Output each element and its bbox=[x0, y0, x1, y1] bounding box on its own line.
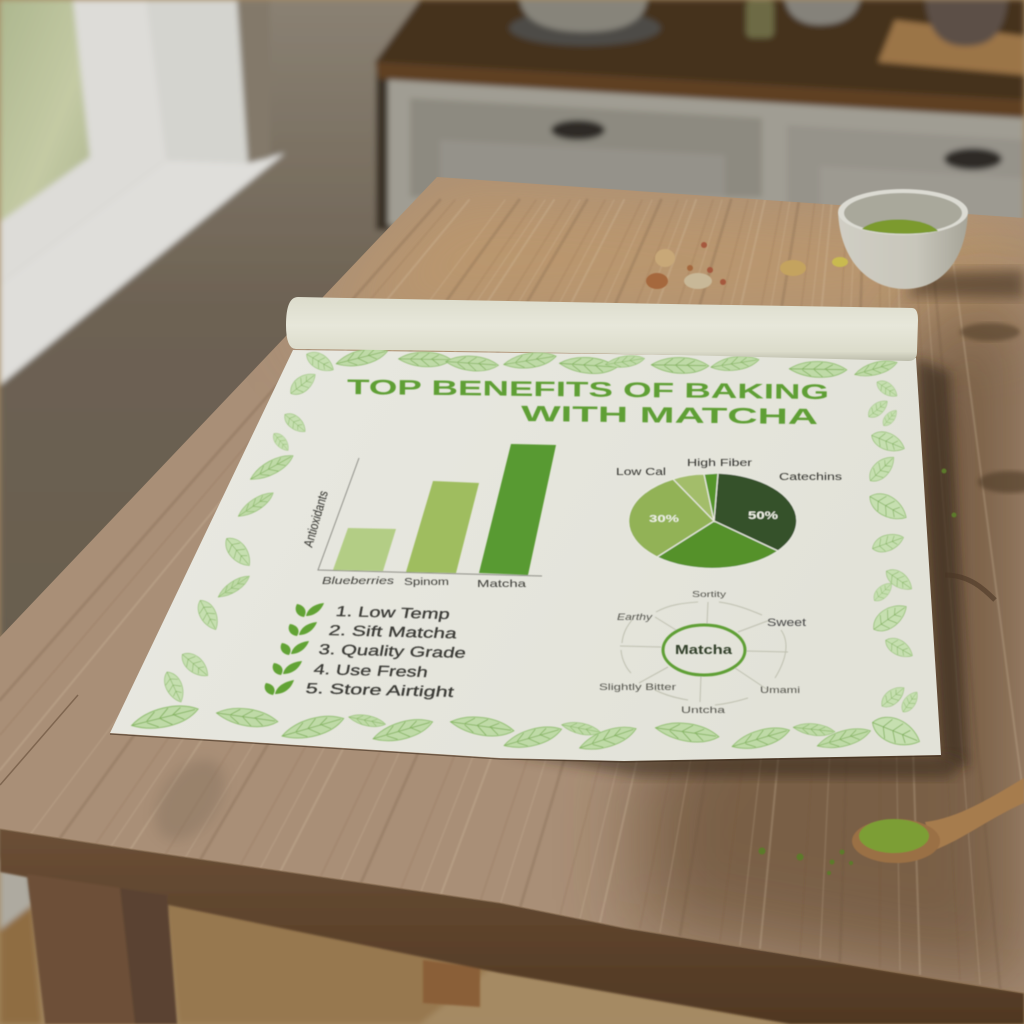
pie labels bbox=[616, 458, 842, 525]
icon: wooden spoon with matcha bbox=[758, 468, 1024, 875]
leaf bullets bbox=[265, 603, 324, 695]
wheel labels: Slightly Bitter bbox=[599, 682, 676, 693]
bowl shadow band bbox=[905, 270, 1024, 298]
bar: spinach bbox=[406, 481, 479, 573]
list text: 1. Low Temp bbox=[334, 604, 451, 623]
pie labels: 30% bbox=[649, 514, 679, 525]
white bowl bbox=[520, 0, 647, 32]
pie labels: Catechins bbox=[779, 472, 842, 483]
list text: 4. Use Fresh bbox=[312, 662, 429, 681]
bar labels bbox=[322, 575, 526, 590]
bar: blueberries bbox=[333, 528, 396, 571]
knots bbox=[960, 323, 1020, 341]
wheel spokes and ring bbox=[620, 602, 788, 705]
window frame bbox=[0, 0, 167, 284]
cutting board bbox=[878, 20, 1024, 75]
paper bottom cast shadow bbox=[500, 752, 966, 778]
floor shade near apron bbox=[165, 900, 500, 1024]
wall trim beside window bbox=[237, 0, 270, 163]
far leg bbox=[423, 960, 480, 1007]
leaves: top edge bbox=[303, 346, 899, 380]
tips list bbox=[265, 603, 467, 701]
window glass bbox=[0, 0, 90, 222]
paper roll bbox=[286, 297, 918, 361]
small jar bbox=[746, 0, 774, 38]
poster content bbox=[265, 376, 842, 715]
poster paper bbox=[110, 297, 941, 762]
left drawer bbox=[410, 98, 762, 197]
paper right cast shadow bbox=[916, 358, 968, 768]
tabletop bbox=[0, 177, 1024, 993]
leaf border bbox=[130, 346, 924, 754]
brown cup bbox=[925, 0, 1008, 46]
center circle: Matcha bbox=[663, 625, 745, 675]
cabinet side shadow bbox=[376, 70, 390, 230]
title bbox=[347, 376, 829, 429]
title: WITH MATCHA bbox=[521, 401, 818, 429]
bar labels: Spinom bbox=[404, 576, 449, 588]
plate bbox=[509, 10, 661, 46]
front apron bbox=[0, 829, 1024, 1024]
warm far side bbox=[354, 181, 1016, 319]
window reveal bbox=[147, 0, 248, 163]
bar labels: Blueberries bbox=[322, 575, 395, 587]
leg shade bbox=[120, 888, 177, 1024]
title: TOP BENEFITS OF BAKING bbox=[347, 376, 829, 404]
tabletop shading and grain bbox=[0, 177, 1024, 993]
window sill bbox=[0, 153, 285, 385]
floor left of leg bbox=[0, 905, 42, 1024]
table legs and front bbox=[0, 829, 1024, 1024]
counter surface bbox=[375, 0, 1024, 100]
list text: 2. Sift Matcha bbox=[327, 623, 459, 642]
leaves: left edge bbox=[160, 369, 320, 705]
cabinets bbox=[388, 78, 1024, 225]
wood grain streaks bbox=[0, 200, 1024, 988]
pie slice: high fiber bbox=[704, 473, 718, 521]
pie slice: catechins bbox=[714, 473, 797, 551]
pie slice: low cal bbox=[673, 474, 714, 521]
plank seam bbox=[0, 695, 78, 785]
crumbs bbox=[646, 242, 848, 289]
handles bbox=[551, 120, 605, 140]
icon: bowl of matcha bbox=[838, 189, 968, 289]
floor bbox=[0, 900, 1024, 1024]
wheel labels: Sweet bbox=[767, 617, 806, 629]
wheel labels: Earthy bbox=[617, 612, 653, 622]
rear bowl bbox=[785, 0, 860, 25]
leaves: right edge bbox=[865, 377, 922, 715]
wheel labels: Untcha bbox=[681, 705, 725, 715]
right drawer bbox=[787, 125, 1024, 225]
pie labels: 50% bbox=[748, 510, 778, 522]
pie slice: green bbox=[657, 521, 778, 569]
pie chart bbox=[616, 458, 842, 569]
list text: 5. Store Airtight bbox=[304, 681, 455, 701]
flavor wheel: Matcha bbox=[675, 643, 733, 657]
table front edge highlight bbox=[0, 829, 1024, 993]
wheel labels: Sortity bbox=[692, 589, 727, 599]
pie slice: 30% bbox=[629, 479, 714, 557]
bar: matcha bbox=[479, 444, 556, 575]
wood patch bbox=[154, 761, 224, 840]
wheel labels: Umami bbox=[760, 685, 800, 695]
bar labels: Matcha bbox=[477, 578, 526, 590]
list text bbox=[304, 604, 467, 701]
right drawer panel bbox=[820, 166, 1024, 225]
wheel labels bbox=[599, 589, 806, 715]
pie labels: High Fiber bbox=[687, 458, 753, 469]
paper sheet bbox=[110, 350, 941, 761]
leaves: bottom edge bbox=[130, 702, 924, 754]
list text: 3. Quality Grade bbox=[317, 642, 467, 662]
bar chart: antioxidants bbox=[300, 444, 556, 590]
wall under table bbox=[0, 860, 32, 930]
dark right side bbox=[640, 290, 1024, 993]
front left leg bbox=[27, 874, 177, 1024]
pie labels: Low Cal bbox=[616, 467, 666, 478]
flavor wheel bbox=[599, 589, 806, 715]
left drawer panel bbox=[440, 140, 725, 197]
paper contact line bbox=[110, 734, 941, 762]
y axis label: Antioxidants bbox=[300, 489, 331, 549]
counter edge bbox=[375, 62, 1024, 118]
chart axes bbox=[318, 458, 542, 576]
